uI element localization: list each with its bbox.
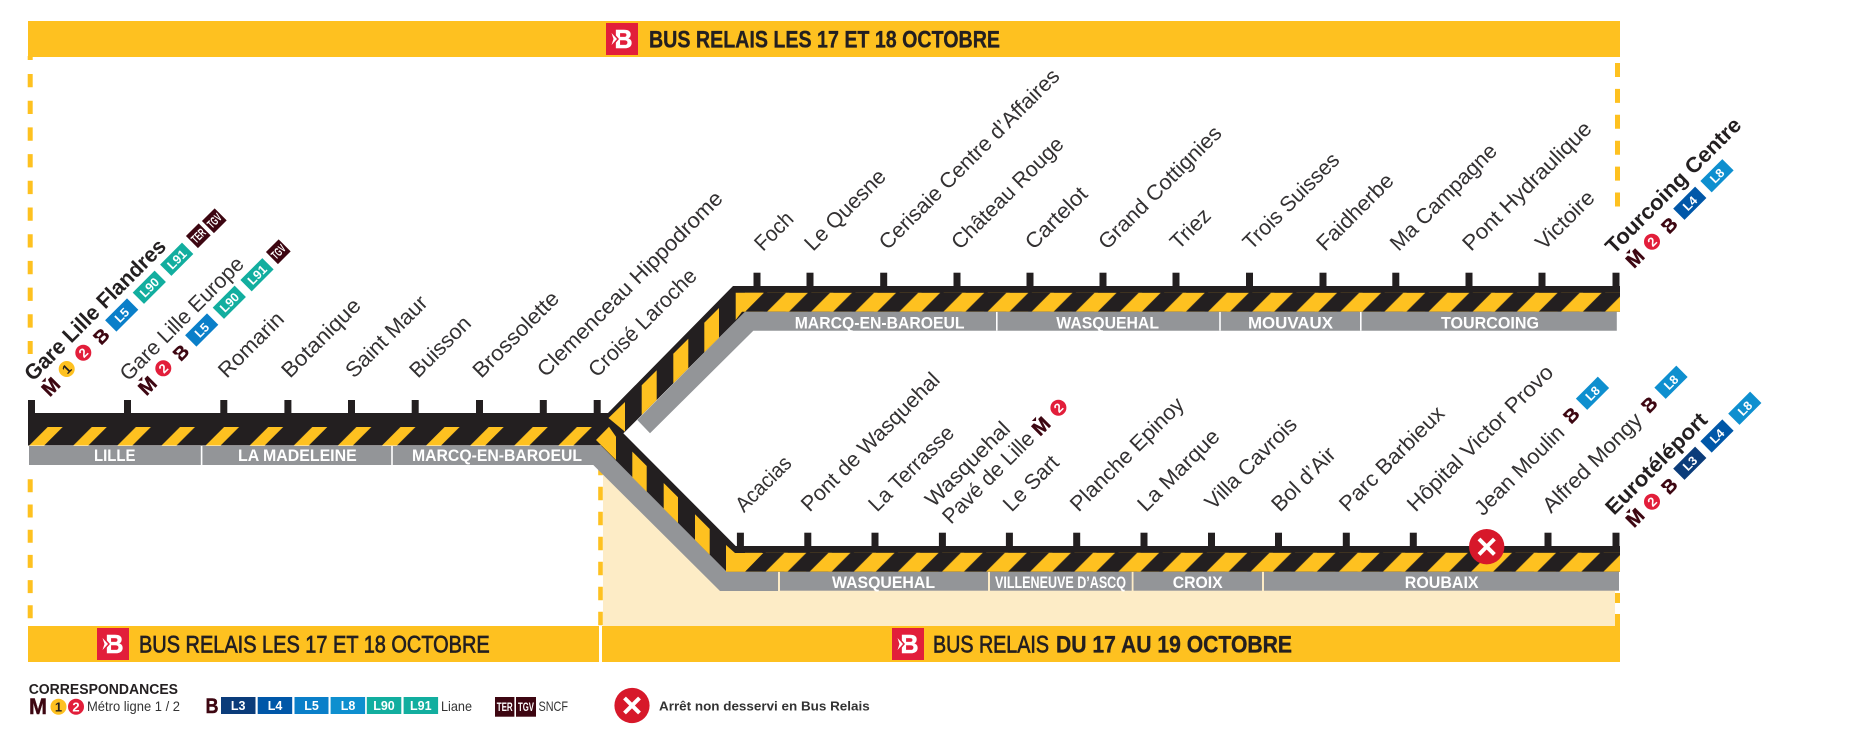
stop labels: lower branch: Planche Epinoy xyxy=(1065,392,1189,516)
banner: top, 17 and 18 October xyxy=(28,21,1620,57)
stop labels: lower branch: Wasquehal xyxy=(920,417,1015,512)
stop: Gare Lille Europe: B xyxy=(169,341,194,366)
stop: Tourcoing Centre: B xyxy=(1658,214,1682,238)
legend: connections: TGV xyxy=(518,700,534,714)
banner: bottom left, 17 and 18 October: BUS RELAIS LES 17 ET 18 OCTOBRE xyxy=(139,632,490,659)
banner: bottom right, 17 to 19 October: B xyxy=(900,629,918,659)
dashed boundaries of the replacement zones xyxy=(30,56,1618,626)
stop: Gare Lille Europe: TGV xyxy=(268,242,289,262)
stop: Gare Lille Flandres: B xyxy=(90,325,114,349)
stop: Eurotéléport: L3 xyxy=(1680,454,1700,474)
stop: Gare Lille Europe: L91 xyxy=(245,262,270,288)
banner: bottom left, 17 and 18 October: B xyxy=(106,629,124,659)
stop labels: common trunk: Brossolette xyxy=(468,286,564,383)
stop labels: upper branch: Grand Cottignies xyxy=(1094,121,1227,254)
legend: connections: L8 xyxy=(341,699,355,713)
stop: Jean Moulin: Jean Moulin xyxy=(1470,421,1569,520)
stop: Jean Moulin: L8 xyxy=(1583,384,1603,404)
legend: connections: L90 xyxy=(373,699,395,713)
stop labels: upper branch: Victoire xyxy=(1531,186,1600,255)
stop: Eurotéléport: L8 xyxy=(1735,399,1755,419)
stop: Gare Lille Europe xyxy=(115,239,291,400)
commune names: WASQUEHAL xyxy=(832,574,935,592)
stop: Tourcoing Centre: Tourcoing Centre xyxy=(1601,113,1746,259)
stop: Gare Lille Flandres: 2 xyxy=(76,345,91,361)
stop labels: lower branch: Pont de Wasquehal xyxy=(796,368,945,516)
stop: Gare Lille Flandres: L91 xyxy=(164,247,190,272)
stop: Gare Lille Flandres: TGV xyxy=(204,211,225,231)
stop labels: common trunk: Romarin xyxy=(213,307,289,383)
legend: connections: L5 xyxy=(304,699,319,713)
commune names: MOUVAUX xyxy=(1248,314,1333,332)
legend: stop not served: Arrêt non desservi en Bus Relais xyxy=(659,700,870,714)
icon: stop not served on the map xyxy=(1469,529,1504,564)
stop: Eurotéléport: Eurotéléport xyxy=(1601,408,1712,520)
stop labels: lower branch: La Terrasse xyxy=(864,421,959,516)
stop: Tourcoing Centre: L8 xyxy=(1707,166,1727,186)
stop labels: lower branch: Acacias xyxy=(731,451,796,517)
legend: connections: CORRESPONDANCES xyxy=(29,682,178,698)
stop labels: lower branch: Bol d’Air xyxy=(1267,442,1341,516)
stop: Gare Lille Europe: Gare Lille Europe xyxy=(115,252,249,386)
legend: connections: SNCF xyxy=(538,698,568,714)
stop labels: upper branch: Château Rouge xyxy=(947,132,1069,254)
stop labels: common trunk: Botanique xyxy=(277,293,366,383)
stop labels: common trunk xyxy=(213,186,728,383)
legend: connections: 2 xyxy=(72,699,80,714)
legend: connections: B xyxy=(206,695,218,718)
stop labels: lower branch: Parc Barbieux xyxy=(1334,401,1450,516)
commune names: MARCQ-EN-BAROEUL xyxy=(795,314,964,332)
commune names: MARCQ-EN-BAROEUL xyxy=(412,447,582,465)
stop: Alfred Mongy: B xyxy=(1638,393,1662,418)
stop labels: lower branch: Hôpital Victor Provo xyxy=(1402,360,1558,516)
stop labels: lower branch: 2 xyxy=(1051,400,1066,416)
legend: connections: L91 xyxy=(410,699,432,713)
legend: connections: 1 xyxy=(55,699,62,714)
legend: connections: Métro ligne 1 / 2 xyxy=(87,698,180,714)
stop: Gare Lille Flandres: L90 xyxy=(137,275,162,300)
banner: top, 17 and 18 October: BUS RELAIS LES 17 ET 18 OCTOBRE xyxy=(649,27,1000,54)
stop: Gare Lille Flandres xyxy=(20,208,227,401)
stop: Eurotéléport: M xyxy=(1622,505,1649,532)
legend: connections: L3 xyxy=(231,699,246,713)
commune names: LA MADELEINE xyxy=(238,447,357,465)
stop labels: upper branch: Pont Hydraulique xyxy=(1458,117,1597,256)
stop labels: lower branch xyxy=(731,360,1558,529)
legend: connections xyxy=(29,682,568,719)
banner: bottom right, 17 to 19 October: BUS RELAIS xyxy=(933,632,1049,659)
stop labels: upper branch: Cerisaie Centre d’Affaires xyxy=(874,64,1064,254)
commune names: LILLE xyxy=(94,447,136,465)
commune names: VILLENEUVE D’ASCQ xyxy=(995,574,1126,592)
stop: Alfred Mongy xyxy=(1538,366,1688,518)
stop: Jean Moulin xyxy=(1470,377,1609,520)
commune names: WASQUEHAL xyxy=(1056,314,1159,332)
stop: Gare Lille Flandres: M xyxy=(38,374,65,401)
stop: Gare Lille Europe: M xyxy=(134,373,162,400)
stop labels: upper branch: Faidherbe xyxy=(1312,169,1399,256)
stop labels: upper branch: Trois Suisses xyxy=(1238,148,1344,254)
stop: Gare Lille Europe: L5 xyxy=(192,320,212,340)
stop: Gare Lille Europe: L90 xyxy=(217,290,242,315)
stop labels: lower branch: La Marque xyxy=(1133,424,1224,516)
stop: Eurotéléport: L4 xyxy=(1707,426,1727,446)
stop labels: upper branch: Triez xyxy=(1165,203,1216,254)
commune names: CROIX xyxy=(1173,574,1223,592)
stop: Gare Lille Flandres: 1 xyxy=(59,361,75,377)
stop: Jean Moulin: B xyxy=(1560,404,1584,428)
legend: connections: Liane xyxy=(441,698,472,714)
stop: Gare Lille Europe: 2 xyxy=(156,361,171,376)
commune names: TOURCOING xyxy=(1441,314,1539,332)
commune names xyxy=(94,314,1539,592)
stop labels: upper branch: Le Quesne xyxy=(800,164,891,256)
banner: top, 17 and 18 October: B xyxy=(614,24,632,54)
stop: Tourcoing Centre: L4 xyxy=(1680,194,1700,214)
legend: connections: TER xyxy=(497,700,513,714)
legend: stop not served xyxy=(614,688,870,723)
banner: bottom right, 17 to 19 October: DU 17 AU 19 OCTOBRE xyxy=(1056,632,1292,659)
stop: Eurotéléport: B xyxy=(1658,474,1682,499)
banner: bottom left, 17 and 18 October xyxy=(28,626,599,662)
legend: connections: L4 xyxy=(268,699,282,713)
commune bands in grey xyxy=(29,312,1619,591)
stop: Gare Lille Flandres: TER xyxy=(188,225,209,246)
legend: connections: M xyxy=(29,694,47,719)
stop: Gare Lille Flandres: L5 xyxy=(112,305,132,325)
stop: Eurotéléport: 2 xyxy=(1644,494,1660,510)
stop labels: common trunk: Buisson xyxy=(405,311,476,383)
stop labels: common trunk: Saint Maur xyxy=(341,291,432,383)
stop: Eurotéléport xyxy=(1601,392,1761,532)
stop labels: common trunk: Croisé Laroche xyxy=(584,264,702,382)
stop ticks xyxy=(28,273,1620,546)
stop: Tourcoing Centre: 2 xyxy=(1644,234,1660,250)
stop labels: upper branch: Cartelot xyxy=(1020,182,1092,254)
line: black body with hazard stripes xyxy=(28,286,1620,572)
stop labels: lower branch: Le Sart xyxy=(998,450,1064,516)
stop labels: upper branch xyxy=(750,64,1600,256)
stop: Tourcoing Centre: M xyxy=(1622,245,1649,273)
stop labels: upper branch: Foch xyxy=(750,207,798,256)
stop labels: lower branch: Villa Cavrois xyxy=(1200,412,1302,514)
banner: bottom right, 17 to 19 October xyxy=(602,626,1620,662)
stop labels: upper branch: Ma Campagne xyxy=(1385,139,1502,256)
stop labels: lower branch: Pavé de Lille xyxy=(938,427,1039,529)
stop: Alfred Mongy: Alfred Mongy xyxy=(1538,408,1647,518)
stop labels: common trunk: Clemenceau Hippodrome xyxy=(532,186,728,382)
stop: Gare Lille Flandres: Gare Lille Flandres xyxy=(20,234,171,386)
area: cream zone of the 17 to 19 October section xyxy=(603,475,1615,626)
stop: Alfred Mongy: L8 xyxy=(1661,373,1681,393)
stop labels: lower branch: M xyxy=(1028,413,1055,440)
commune names: ROUBAIX xyxy=(1405,574,1479,592)
